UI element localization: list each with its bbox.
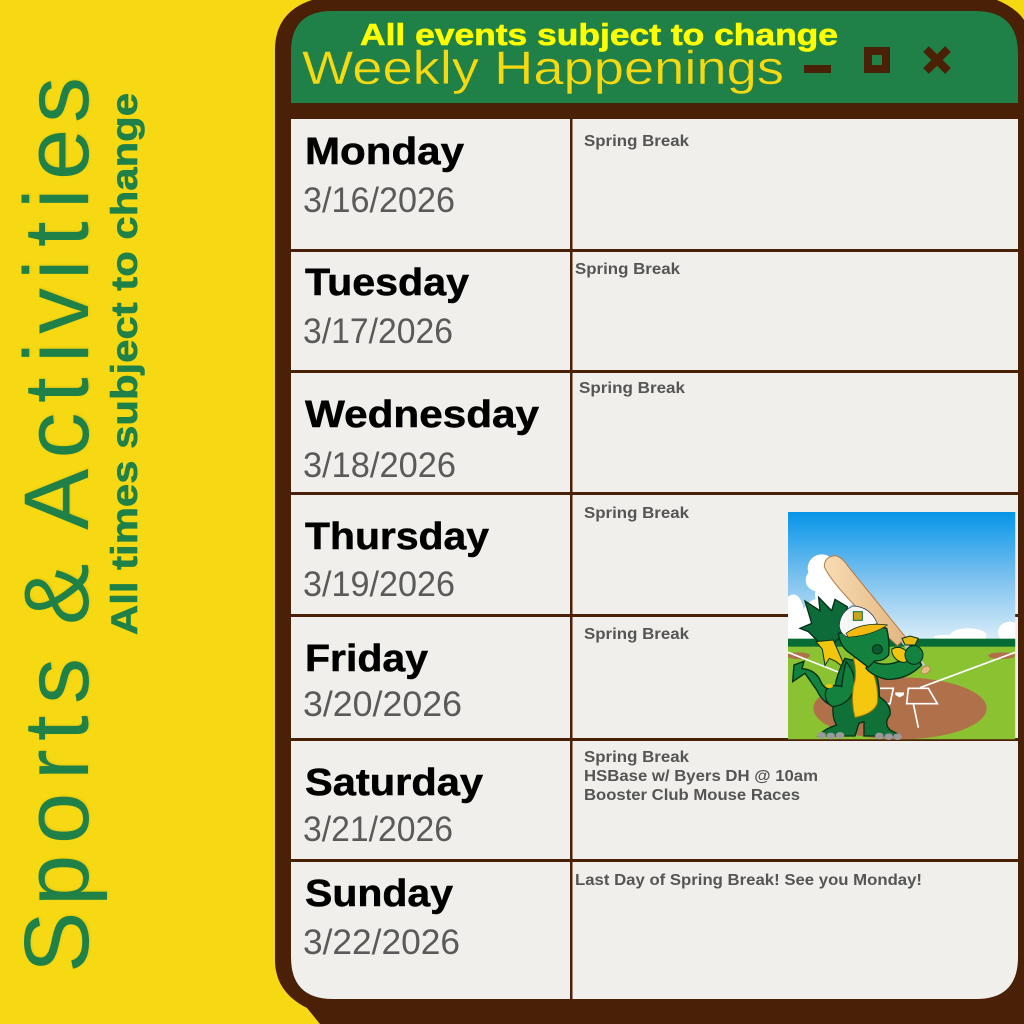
date: 3/18/2026 — [303, 446, 456, 485]
event: Spring Break — [584, 505, 689, 522]
day label: Tuesday — [305, 262, 469, 304]
notice: all events subject to change: All events subject to change — [360, 17, 838, 52]
body and legs silhouette — [818, 658, 902, 736]
window title bar — [291, 11, 1018, 103]
table grid lines — [291, 119, 1018, 999]
date: 3/19/2026 — [303, 565, 455, 604]
event: Spring Break — [584, 626, 689, 643]
lower wing membrane — [816, 640, 846, 669]
event: Spring Break — [579, 380, 685, 397]
bat barrel — [824, 556, 906, 646]
yellow claw of arm — [826, 684, 833, 688]
baseball field scene — [782, 512, 1022, 739]
events list: Booster Club Mouse Races — [584, 787, 800, 804]
sidebar note: all times subject to change: All times subject to change — [104, 93, 145, 635]
date: 3/21/2026 — [303, 810, 453, 849]
icon: close — [926, 49, 948, 71]
row: Sunday — [303, 872, 922, 962]
day label: Sunday — [305, 873, 453, 915]
schedule table background — [291, 119, 1018, 999]
green glove — [905, 646, 923, 664]
events list: Spring Break — [584, 749, 689, 766]
outfield hedge — [788, 639, 1015, 647]
bat handle — [903, 642, 924, 666]
date: 3/16/2026 — [303, 181, 455, 220]
events list — [584, 749, 818, 804]
row: Wednesday — [303, 380, 685, 485]
claws — [817, 732, 902, 740]
hanging arm — [825, 662, 855, 707]
belly — [852, 658, 878, 717]
cap crown — [839, 606, 877, 637]
eye and snout shading — [872, 645, 882, 654]
home plate — [895, 692, 904, 697]
row: Saturday — [303, 749, 818, 849]
sidebar title: Sports & Activities: Sports & Activities — [6, 77, 108, 973]
row: Friday — [303, 626, 689, 724]
head — [838, 627, 889, 667]
date: 3/20/2026 — [303, 685, 462, 724]
cap logo — [853, 612, 862, 620]
title bar background — [291, 11, 1018, 103]
heading: Weekly Happenings: Weekly Happenings — [302, 41, 784, 94]
upper wing — [800, 597, 847, 643]
date: 3/17/2026 — [303, 312, 453, 351]
upper yellow fingers — [902, 636, 918, 645]
row: Monday — [303, 131, 689, 220]
event: Spring Break — [584, 133, 689, 150]
clouds — [782, 554, 1022, 643]
day label: Saturday — [305, 762, 483, 804]
event: Last Day of Spring Break! See you Monday! — [575, 872, 922, 889]
yellow hand — [892, 647, 911, 662]
cap brim — [846, 624, 887, 637]
day label: Monday — [305, 131, 464, 173]
bat knob — [920, 666, 930, 674]
icon: maximize — [864, 47, 890, 73]
day label: Friday — [305, 638, 428, 680]
field lines — [788, 652, 1015, 728]
row: Tuesday — [303, 261, 680, 351]
grass — [788, 647, 1015, 739]
bases dirt — [787, 652, 1015, 739]
illustration: baseball dragon — [782, 512, 1022, 740]
sky — [788, 512, 1015, 639]
event: Spring Break — [575, 261, 680, 278]
events list: HSBase w/ Byers DH @ 10am — [584, 768, 818, 785]
icon: minimize — [804, 65, 831, 73]
row: Thursday — [303, 505, 689, 604]
date: 3/22/2026 — [303, 923, 460, 962]
tail — [793, 661, 847, 707]
dragon mascot — [793, 597, 923, 740]
batting arm — [866, 653, 922, 679]
day label: Thursday — [305, 516, 489, 558]
day label: Wednesday — [305, 394, 539, 436]
brown window frame — [275, 0, 1024, 1024]
bat handle over grip — [902, 638, 914, 655]
